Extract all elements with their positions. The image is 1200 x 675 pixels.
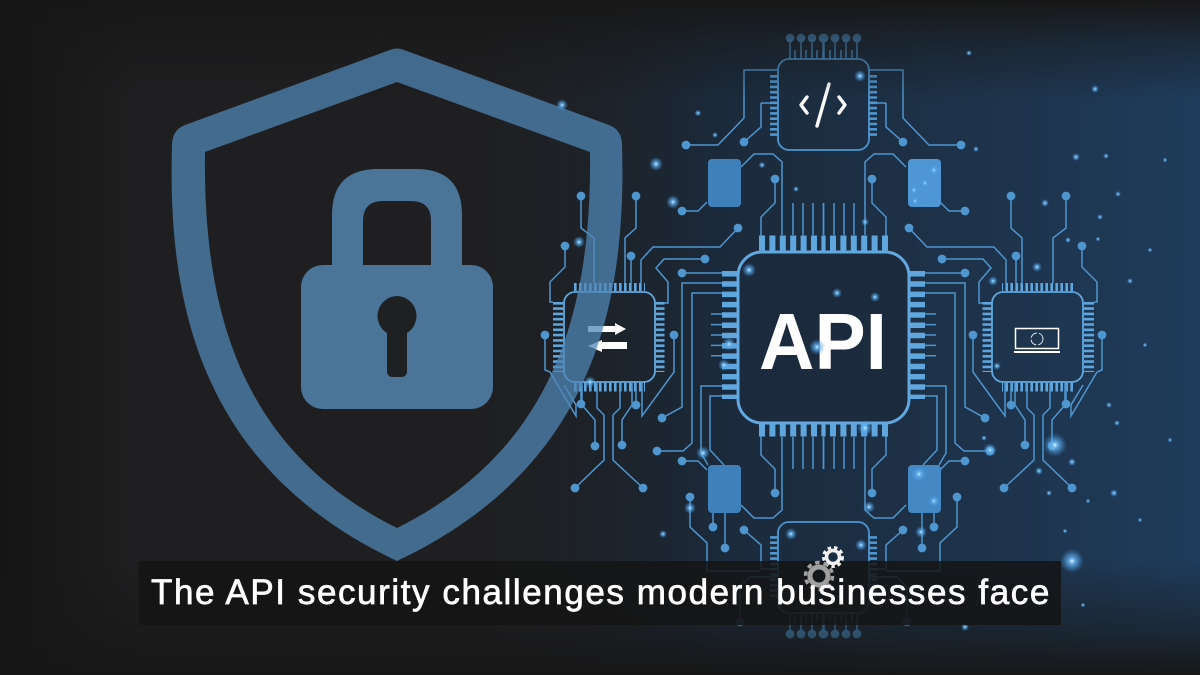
lock body <box>301 265 493 409</box>
caption text: The API security challenges modern businesses face <box>151 573 1050 612</box>
circuit board diagram <box>541 34 1106 638</box>
left side chip <box>541 192 678 492</box>
top chip <box>778 59 869 150</box>
caption <box>139 548 1061 625</box>
icon: transfer arrows <box>588 323 627 352</box>
bottom chip <box>778 522 869 613</box>
circuit traces and pins <box>641 34 1006 638</box>
padlock <box>301 169 493 409</box>
rectangular components <box>708 159 941 513</box>
main API chip <box>738 252 909 423</box>
glowing particles <box>556 50 1172 631</box>
keyhole <box>378 296 416 377</box>
API label: API <box>759 297 887 386</box>
shield outline <box>172 48 622 561</box>
icon: gears <box>806 548 842 590</box>
lock shackle <box>332 169 462 275</box>
right side chip <box>969 192 1106 492</box>
icon: laptop <box>1014 328 1060 352</box>
icon: code brackets <box>801 84 845 126</box>
caption backdrop <box>139 561 1061 625</box>
